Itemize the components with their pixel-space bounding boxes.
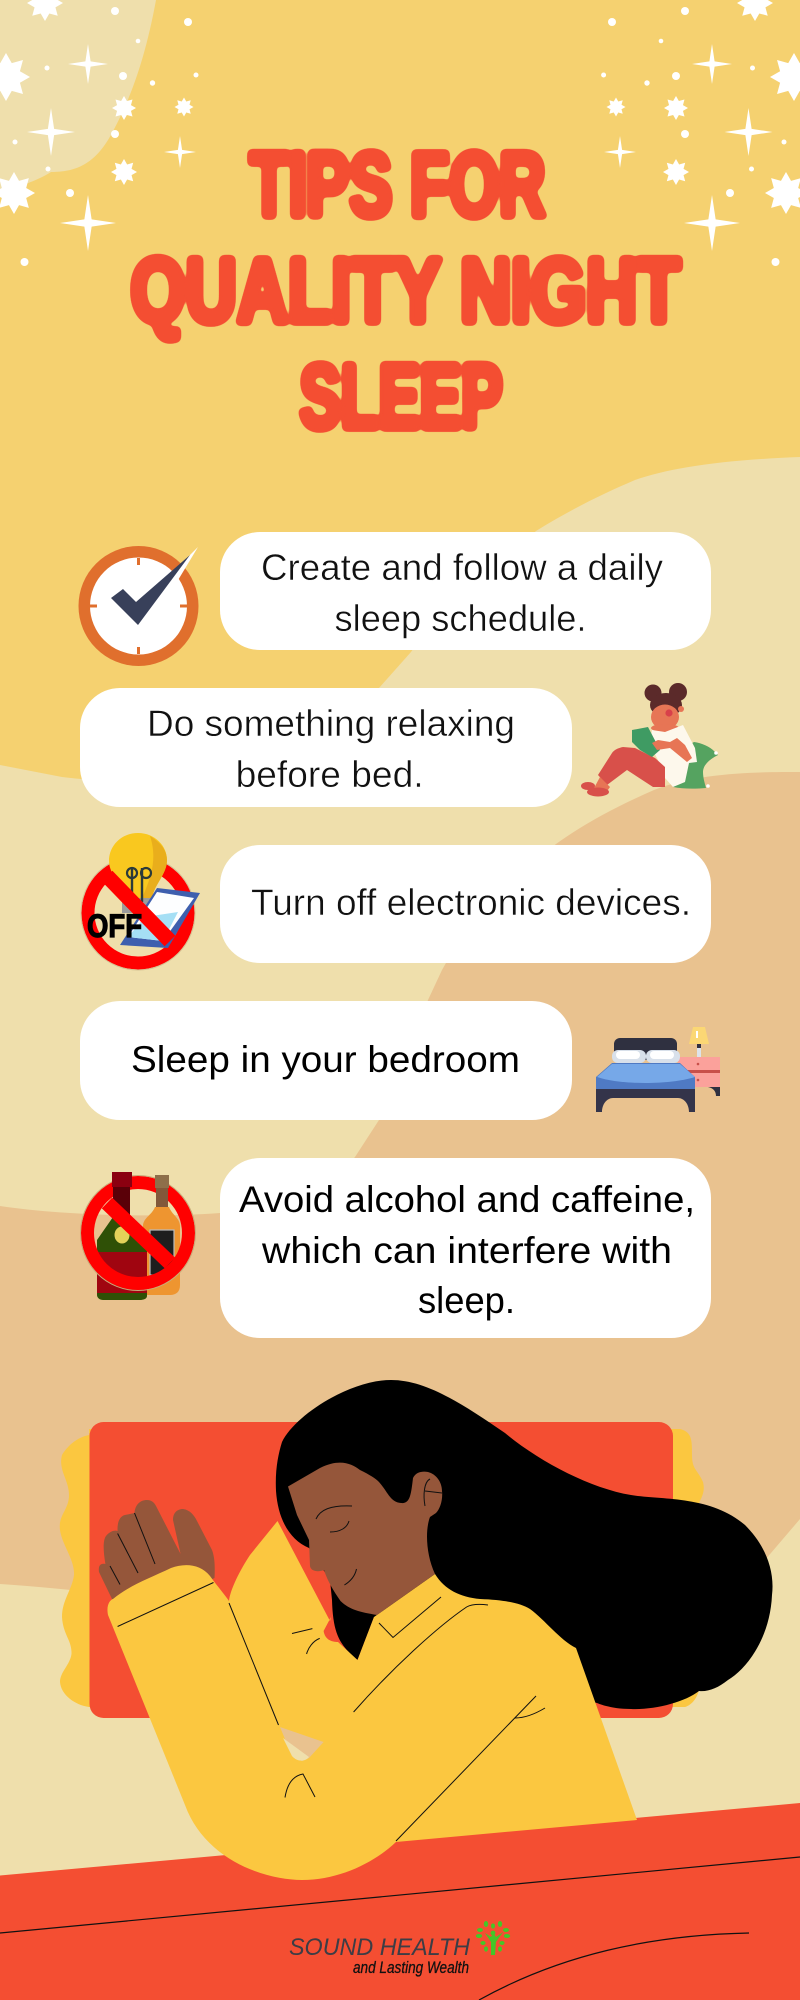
shirt bbox=[107, 1521, 637, 1880]
logo: Sound Health and Lasting Wealth: SOUND HEALTH bbox=[289, 1934, 471, 1961]
bubble: tip 5: Avoid alcohol and caffeine, bbox=[239, 1179, 695, 1220]
title: SLEEP bbox=[300, 346, 502, 448]
bubble: tip 5 bbox=[220, 1158, 711, 1338]
bubble: tip 4: Sleep in your bedroom bbox=[131, 1039, 520, 1080]
bubble: tip 2: before bed. bbox=[236, 754, 424, 795]
tip 3: devices off icon and bubble bbox=[81, 833, 711, 970]
bubble: tip 3: Turn off electronic devices. bbox=[251, 882, 691, 923]
hand bbox=[99, 1500, 215, 1610]
hair bbox=[276, 1380, 773, 1709]
tip 5: alcohol icon and bubble bbox=[80, 1158, 711, 1338]
title: TIPS FOR bbox=[250, 134, 546, 236]
line details bbox=[110, 1479, 545, 1841]
icon: clock with check mark bbox=[78, 546, 198, 666]
icon: light bulb and phone crossed out bbox=[81, 833, 200, 970]
bubble: tip 3 bbox=[220, 845, 711, 963]
title bbox=[130, 134, 680, 448]
arm gap bbox=[280, 1727, 324, 1761]
tip 4: bubble and bed icon bbox=[80, 1001, 720, 1120]
bubble: tip 4 bbox=[80, 1001, 572, 1120]
decorative stars and sparkles bbox=[0, 0, 800, 266]
icon: bottles crossed out bbox=[80, 1172, 196, 1300]
bubble: tip 2: Do something relaxing bbox=[147, 703, 515, 744]
icon: bed with nightstand and lamp bbox=[596, 1027, 720, 1112]
bubble: tip 5: which can interfere with bbox=[261, 1230, 672, 1271]
pillow ruffle bbox=[60, 1429, 704, 1707]
face and neck bbox=[288, 1463, 442, 1615]
pillow bbox=[90, 1422, 673, 1718]
icon: green tree bbox=[476, 1921, 510, 1955]
icon: girl reading a book bbox=[581, 683, 718, 796]
tip 1: clock icon and bubble bbox=[78, 532, 711, 666]
logo: Sound Health and Lasting Wealth bbox=[289, 1921, 510, 1977]
bubble: tip 1 bbox=[220, 532, 711, 650]
tip 2: bubble and reading girl bbox=[80, 683, 718, 807]
bubble: tip 5: sleep. bbox=[418, 1280, 515, 1321]
logo: Sound Health and Lasting Wealth: and Lasting Wealth bbox=[353, 1958, 469, 1977]
illustration: woman sleeping on a pillow bbox=[0, 1380, 800, 2000]
bubble: tip 2 bbox=[80, 688, 572, 807]
bubble: tip 1: sleep schedule. bbox=[334, 598, 586, 639]
bubble: tip 1: Create and follow a daily bbox=[261, 547, 663, 588]
icon: light bulb and phone crossed out: OFF bbox=[87, 908, 142, 944]
blanket bbox=[0, 1803, 800, 2000]
